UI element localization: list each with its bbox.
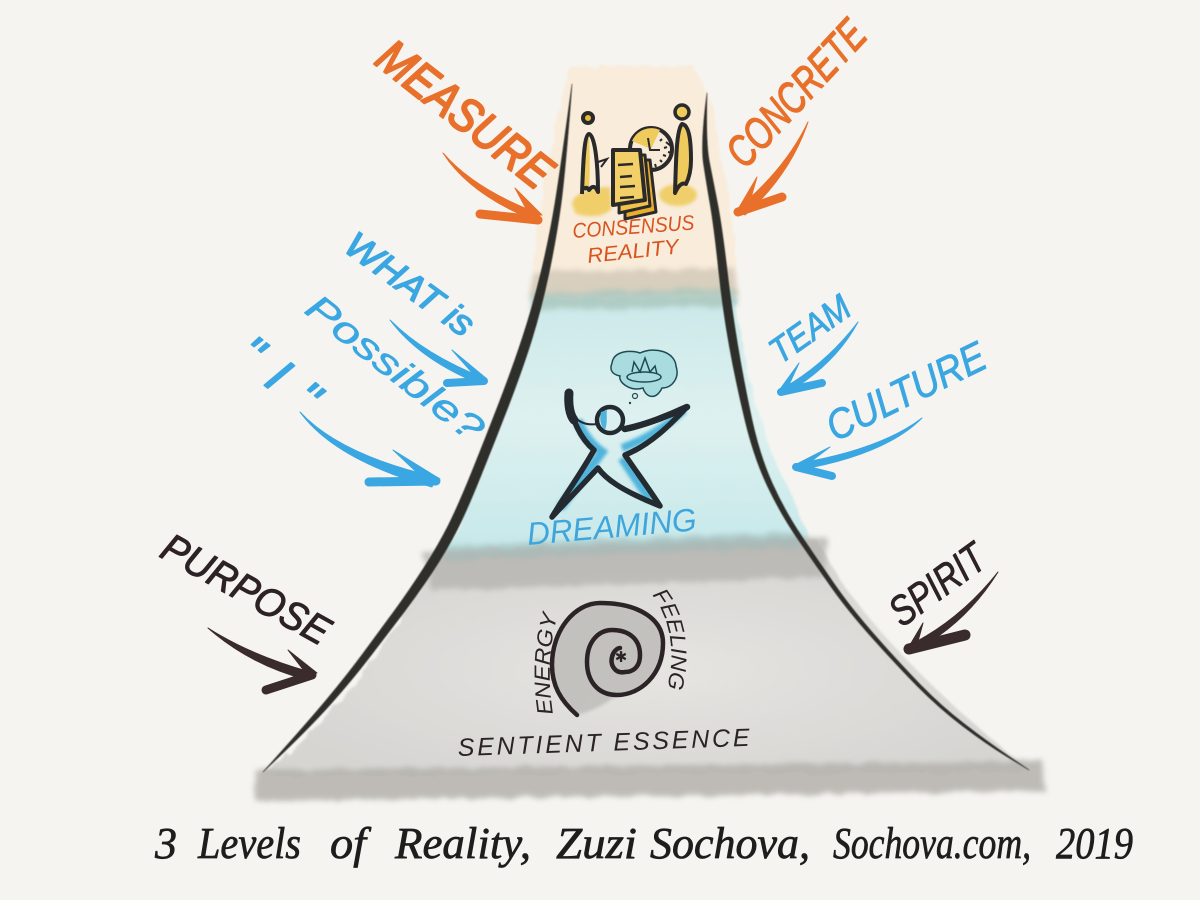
panel: dreaming band [440, 298, 815, 565]
caption: 3 [154, 819, 177, 868]
icon: documents [613, 150, 656, 219]
caption: Levels [197, 819, 301, 868]
icon: left person [582, 113, 607, 194]
panel: sentient essence band [254, 532, 1044, 801]
label: purpose: PURPOSE [154, 525, 339, 655]
arrow: I [300, 412, 440, 487]
caption: of [330, 819, 372, 868]
label: sentient essence: SENTIENT ESSENCE [457, 724, 750, 762]
label: dreaming: DREAMING [525, 501, 698, 552]
icon: dreaming person [552, 393, 687, 517]
arrow: team [778, 322, 858, 394]
arrow: what is possible [390, 320, 487, 384]
icon: spiral [552, 603, 663, 715]
caption: Sochova, [650, 819, 810, 868]
label: what is: WHAT is [337, 223, 483, 345]
mountain outline right [703, 93, 1029, 770]
label: measure: MEASURE [366, 30, 563, 200]
icon: clock [630, 128, 672, 170]
caption: Sochova.com, [833, 819, 1031, 868]
icon: right person [675, 105, 691, 193]
icon: consensus meeting [572, 105, 697, 219]
icon: spark: ✱ [615, 649, 627, 666]
label: possible?: Possible? [298, 286, 492, 450]
arrow: culture [793, 418, 922, 476]
arrow: purpose [208, 628, 317, 690]
caption [154, 819, 1133, 868]
arrow: spirit [907, 572, 998, 652]
label: energy: ENERGY [534, 610, 556, 714]
label: team: TEAM [761, 286, 858, 372]
arrow: measure [443, 153, 542, 221]
label: culture: CULTURE [818, 332, 994, 450]
label: I: "I" [226, 325, 333, 427]
icon: thought bubble with crown [611, 350, 677, 404]
label: spirit: SPIRIT [880, 532, 997, 635]
caption: Reality, [394, 819, 531, 868]
label: consensus: CONSENSUS [572, 212, 695, 243]
label: feeling: FEELING [652, 590, 686, 690]
caption: 2019 [1056, 819, 1133, 868]
caption: Zuzi [556, 819, 637, 868]
panel: consensus reality band [530, 66, 738, 310]
label: reality: REALITY [586, 235, 682, 268]
mountain outline left [263, 84, 572, 772]
arrow: concrete [736, 122, 808, 215]
